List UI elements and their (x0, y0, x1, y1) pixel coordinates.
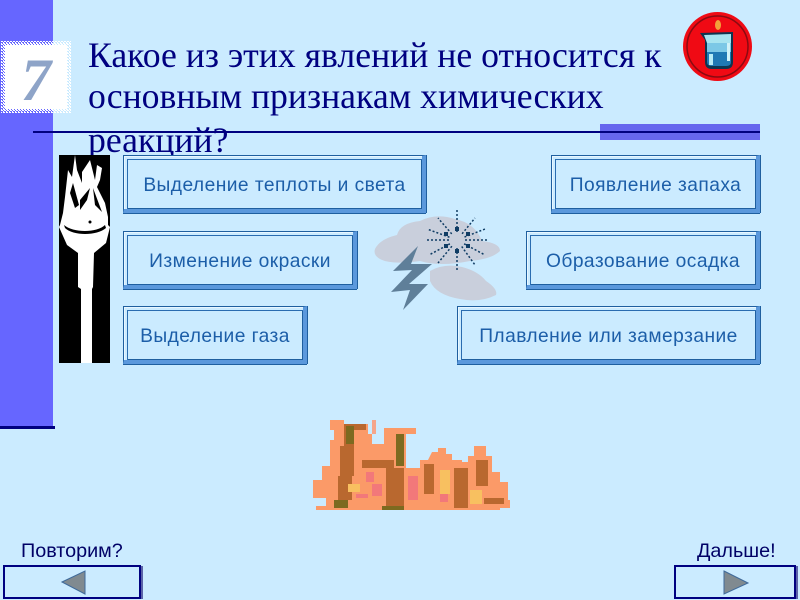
icon: storm cloud (374, 210, 500, 310)
sidebar base line (0, 426, 55, 429)
button: melting or freezing (457, 306, 760, 364)
button: odour: Появление запаха (570, 175, 741, 196)
button: heat and light: Выделение теплоты и света (143, 175, 406, 196)
nav label: next: Дальше! (697, 540, 776, 562)
slide number badge: 7 (21, 47, 53, 113)
nav label: repeat: Повторим? (21, 540, 123, 562)
button: gas release: Выделение газа (140, 326, 290, 347)
title (88, 35, 662, 160)
button: melting or freezing: Плавление или замерзание (479, 326, 738, 347)
button: colour change (123, 231, 357, 289)
button: precipitate (526, 231, 760, 289)
icon: pixel flames (313, 420, 510, 510)
button: back arrow (3, 565, 143, 599)
accent bar (600, 124, 760, 140)
button: precipitate: Образование осадка (546, 251, 740, 272)
icon: torch (59, 155, 110, 363)
title: реакций? (88, 120, 228, 160)
icon: beaker badge (683, 12, 752, 81)
button: heat and light (123, 155, 426, 213)
button: gas release (123, 306, 307, 364)
title: Какое из этих явлений не относится к (88, 35, 661, 75)
slide number badge (1, 41, 71, 113)
title underline (33, 131, 760, 133)
button: colour change: Изменение окраски (149, 251, 331, 272)
button: forward arrow (674, 565, 798, 599)
button: odour (551, 155, 760, 213)
left sidebar (0, 0, 53, 426)
title: основным признакам химических (88, 76, 604, 116)
